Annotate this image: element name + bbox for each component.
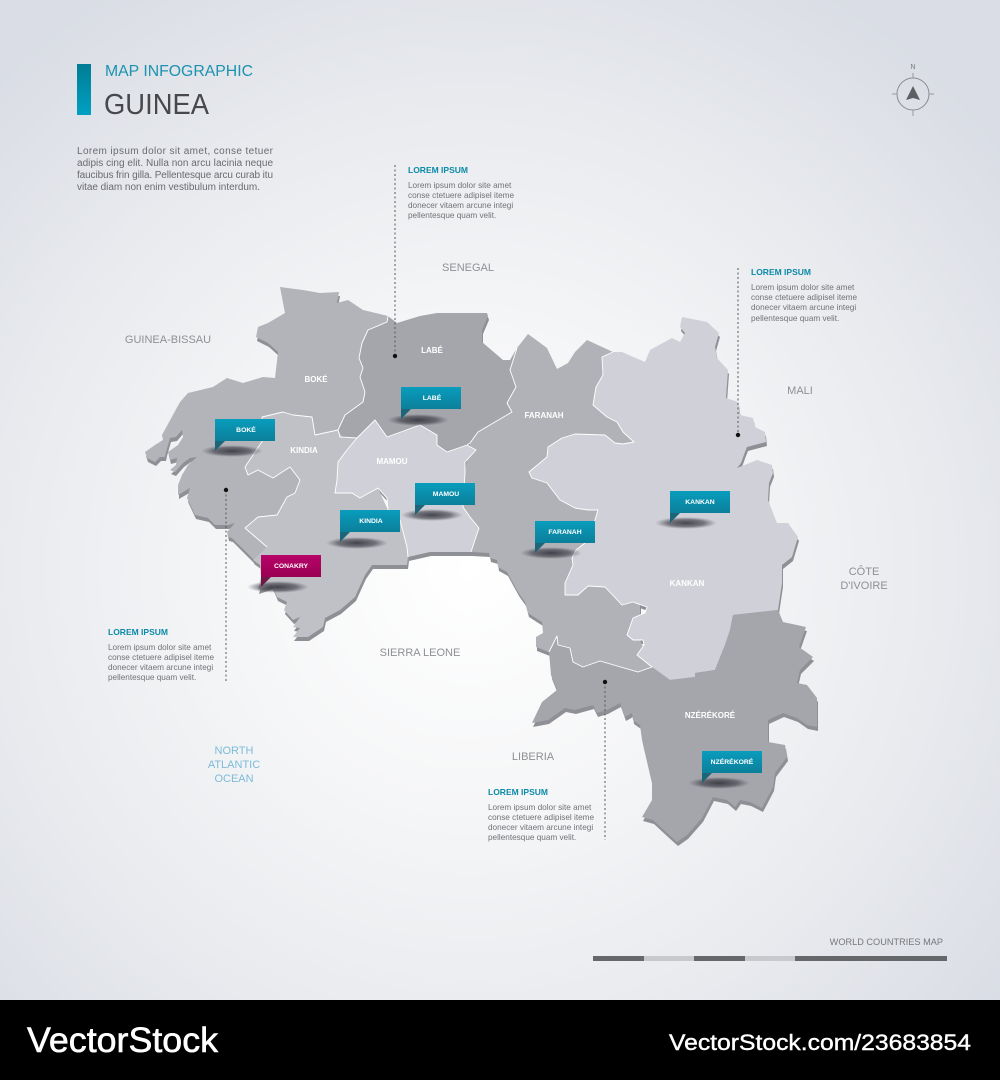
pin: Boke (201, 419, 275, 457)
callout: left: LOREM IPSUM (108, 627, 168, 637)
callout: top centre (393, 165, 514, 358)
country: Senegal: SENEGAL (442, 262, 494, 274)
footer bar (0, 1000, 1000, 1080)
region: Labe (338, 313, 517, 452)
region: Faranah (460, 334, 652, 672)
footer bar: VectorStock.com/23683854 (669, 1030, 971, 1055)
scale bar (593, 937, 947, 961)
callout: bottom: pellentesque quam velit. (488, 833, 576, 842)
pin: Conakry (247, 555, 321, 593)
pin: Kindia: KINDIA (359, 518, 383, 525)
callout: bottom: LOREM IPSUM (488, 787, 548, 797)
country: Liberia: LIBERIA (512, 751, 555, 763)
title block (77, 63, 253, 121)
pin: Kankan (655, 491, 730, 529)
scale bar: WORLD COUNTRIES MAP (830, 937, 943, 947)
intro text: adipis cing elit. Nulla non arcu lacinia neque (77, 158, 273, 169)
pin: Labe (387, 387, 461, 426)
callout: left: pellentesque quam velit. (108, 673, 196, 682)
region borders (245, 316, 652, 672)
pin: Kankan: KANKAN (685, 499, 715, 506)
pin: Mamou (401, 483, 475, 521)
pin: Nzerekore (688, 751, 762, 789)
callout: top centre: Lorem ipsum dolor site amet (408, 181, 512, 190)
title block: MAP INFOGRAPHIC (105, 63, 253, 80)
pin: Conakry: CONAKRY (274, 563, 309, 570)
pin: Faranah: FARANAH (548, 529, 582, 536)
callout: left (108, 488, 228, 682)
callout: top centre: pellentesque quam velit. (408, 211, 496, 220)
map of Guinea (145, 287, 817, 842)
region: Kindia (245, 412, 408, 637)
label: Nzerekore region: NZÉRÉKORÉ (685, 711, 736, 720)
title block: GUINEA (104, 89, 210, 121)
region: Boke (145, 287, 388, 560)
footer bar: VectorStock (27, 1021, 219, 1060)
pin: Boke: BOKÉ (236, 425, 256, 434)
callout: bottom (488, 680, 607, 842)
callout: top centre: conse ctetuere adipisel iteme (408, 191, 514, 200)
callout: right (736, 267, 857, 437)
callout: top centre: LOREM IPSUM (408, 165, 468, 175)
label: Boke region: BOKÉ (304, 375, 328, 384)
callout: left: Lorem ipsum dolor site amet (108, 643, 212, 652)
callout: bottom: Lorem ipsum dolor site amet (488, 803, 592, 812)
label: Kankan region: KANKAN (670, 579, 705, 588)
country: Cote d'Ivoire: D'IVOIRE (840, 580, 888, 592)
callout: right: LOREM IPSUM (751, 267, 811, 277)
callout: right: donecer vitaem arcune integi (751, 303, 856, 312)
callout: right: conse ctetuere adipisel iteme (751, 293, 857, 302)
country: Guinea-Bissau: GUINEA-BISSAU (125, 334, 211, 346)
intro text: vitae diam non enim vestibulum interdum. (77, 182, 260, 193)
callout: bottom: conse ctetuere adipisel iteme (488, 813, 594, 822)
intro text (77, 146, 274, 193)
region: Nzerekore (532, 610, 817, 842)
intro text: faucibus frin gilla. Pellentesque arcu curab itu (77, 170, 273, 181)
label: Kindia region: KINDIA (290, 446, 318, 455)
country: Sierra Leone: SIERRA LEONE (380, 647, 460, 659)
pin: Nzerekore: NZÉRÉKORÉ (711, 757, 754, 766)
callout: bottom: donecer vitaem arcune integi (488, 823, 593, 832)
intro text: Lorem ipsum dolor sit amet, conse tetuer (77, 146, 274, 157)
label: Mamou region: MAMOU (376, 457, 408, 466)
pin: Faranah (520, 521, 595, 559)
callout: right: Lorem ipsum dolor site amet (751, 283, 855, 292)
pin: Labe: LABÉ (423, 393, 442, 402)
callout: top centre: donecer vitaem arcune integi (408, 201, 513, 210)
pin: Mamou: MAMOU (433, 491, 459, 498)
region: Kankan (529, 317, 798, 680)
region: Mamou (335, 420, 479, 557)
ocean label: NORTH (215, 745, 253, 757)
pin: Kindia (326, 510, 400, 549)
callout: left: conse ctetuere adipisel iteme (108, 653, 214, 662)
ocean label: ATLANTIC (208, 759, 260, 771)
country: Cote d'Ivoire: CÔTE (849, 566, 879, 578)
country: Mali: MALI (787, 385, 813, 397)
callout: right: pellentesque quam velit. (751, 314, 839, 323)
compass (892, 64, 934, 116)
ocean label: OCEAN (214, 773, 254, 785)
callout: left: donecer vitaem arcune integi (108, 663, 213, 672)
label: Faranah region: FARANAH (524, 411, 564, 420)
compass: N (910, 64, 916, 71)
label: Labe region: LABÉ (421, 346, 444, 355)
